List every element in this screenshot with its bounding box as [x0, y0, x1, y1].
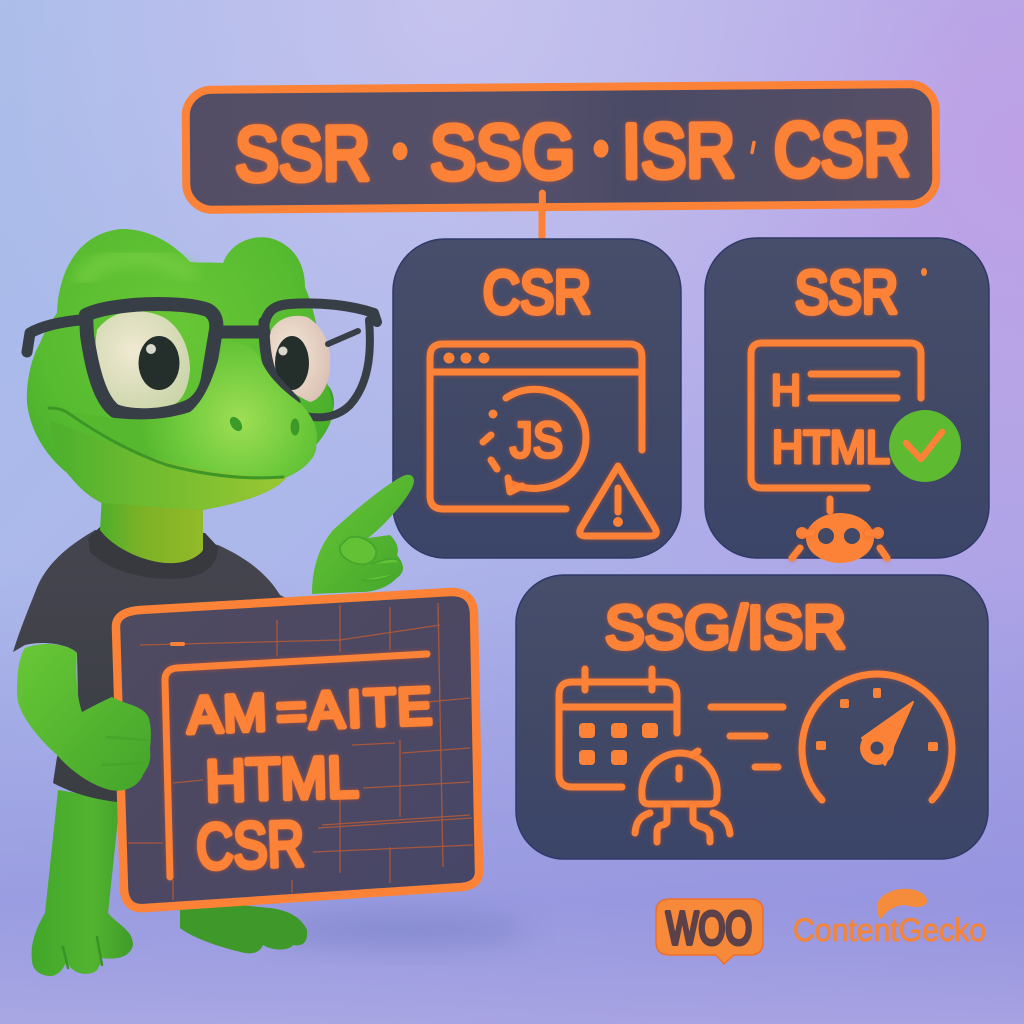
title banner [186, 84, 936, 210]
gecko mouth smile [49, 408, 283, 478]
board text: HTML: HTML [205, 745, 359, 814]
heading: SSG/ISR: SSG/ISR [605, 594, 846, 661]
gecko right eye [269, 316, 330, 402]
gecko nostrils [227, 415, 300, 436]
whiteboard [116, 592, 479, 908]
gecko toe lines [63, 937, 102, 968]
gecko glasses [27, 303, 377, 417]
icon: document lines [811, 374, 897, 398]
icon: calendar [559, 669, 677, 787]
title text: SSG: SSG [430, 110, 575, 196]
icon: crawler spider [635, 751, 730, 842]
gecko left eye [95, 311, 190, 410]
floor shadow [270, 914, 530, 946]
board small marks [172, 642, 183, 646]
connector line [538, 193, 546, 239]
heading: CSR: CSR [483, 259, 591, 326]
panel: SSR [705, 238, 989, 563]
icon: JS loading ring [483, 389, 586, 492]
gecko head [27, 229, 333, 510]
gecko collar [88, 527, 218, 579]
gecko pointing hand [312, 475, 414, 594]
panel: CSR [393, 239, 681, 558]
board scratch lines [128, 603, 473, 900]
heading: SSR: SSR [795, 259, 898, 326]
icon: window dots [444, 352, 490, 364]
decorative dot [921, 268, 927, 276]
icon: crawler bot [792, 499, 887, 563]
logo text: WOO: WOO [666, 902, 752, 954]
board inner frame [165, 654, 427, 877]
gecko chin [50, 420, 287, 510]
gecko shirt [13, 530, 290, 802]
gecko curled fingers [340, 537, 400, 581]
title text: SSR: SSR [235, 111, 370, 198]
gecko right foot [180, 905, 307, 953]
logo: ContentGecko [793, 889, 986, 948]
title text: CSR: CSR [774, 107, 910, 193]
gecko back eye bump [310, 383, 334, 423]
board text: AM=AITE: AM=AITE [186, 678, 433, 745]
icon: green check badge [889, 410, 961, 482]
icon: speedometer [802, 674, 952, 800]
board text: CSR: CSR [195, 808, 305, 883]
connector stub [539, 193, 546, 207]
gecko left leg and foot [32, 790, 133, 976]
gecko crest highlight [84, 257, 187, 278]
icon: JS loading ring: JS [510, 412, 563, 468]
gecko neck [100, 495, 203, 563]
gecko character [13, 229, 377, 976]
finger grooves [103, 737, 148, 765]
separator tick [752, 142, 754, 152]
text: HTML: HTML [772, 421, 890, 473]
icon: speed lines [711, 707, 783, 767]
icon: server monitor [751, 343, 921, 488]
logo swoosh [877, 889, 927, 919]
gecko snout [72, 342, 317, 477]
logo wordmark: ContentGecko [793, 912, 986, 948]
title text: ISR: ISR [622, 109, 735, 195]
separator dot [392, 142, 408, 160]
panel: SSG/ISR [516, 575, 988, 859]
separator dot [593, 140, 609, 158]
text: H: H [771, 366, 801, 415]
icon: browser window [430, 344, 642, 509]
gecko arm and holding hand [17, 644, 151, 791]
logo: Woo [656, 899, 763, 964]
icon: warning triangle [580, 466, 656, 536]
